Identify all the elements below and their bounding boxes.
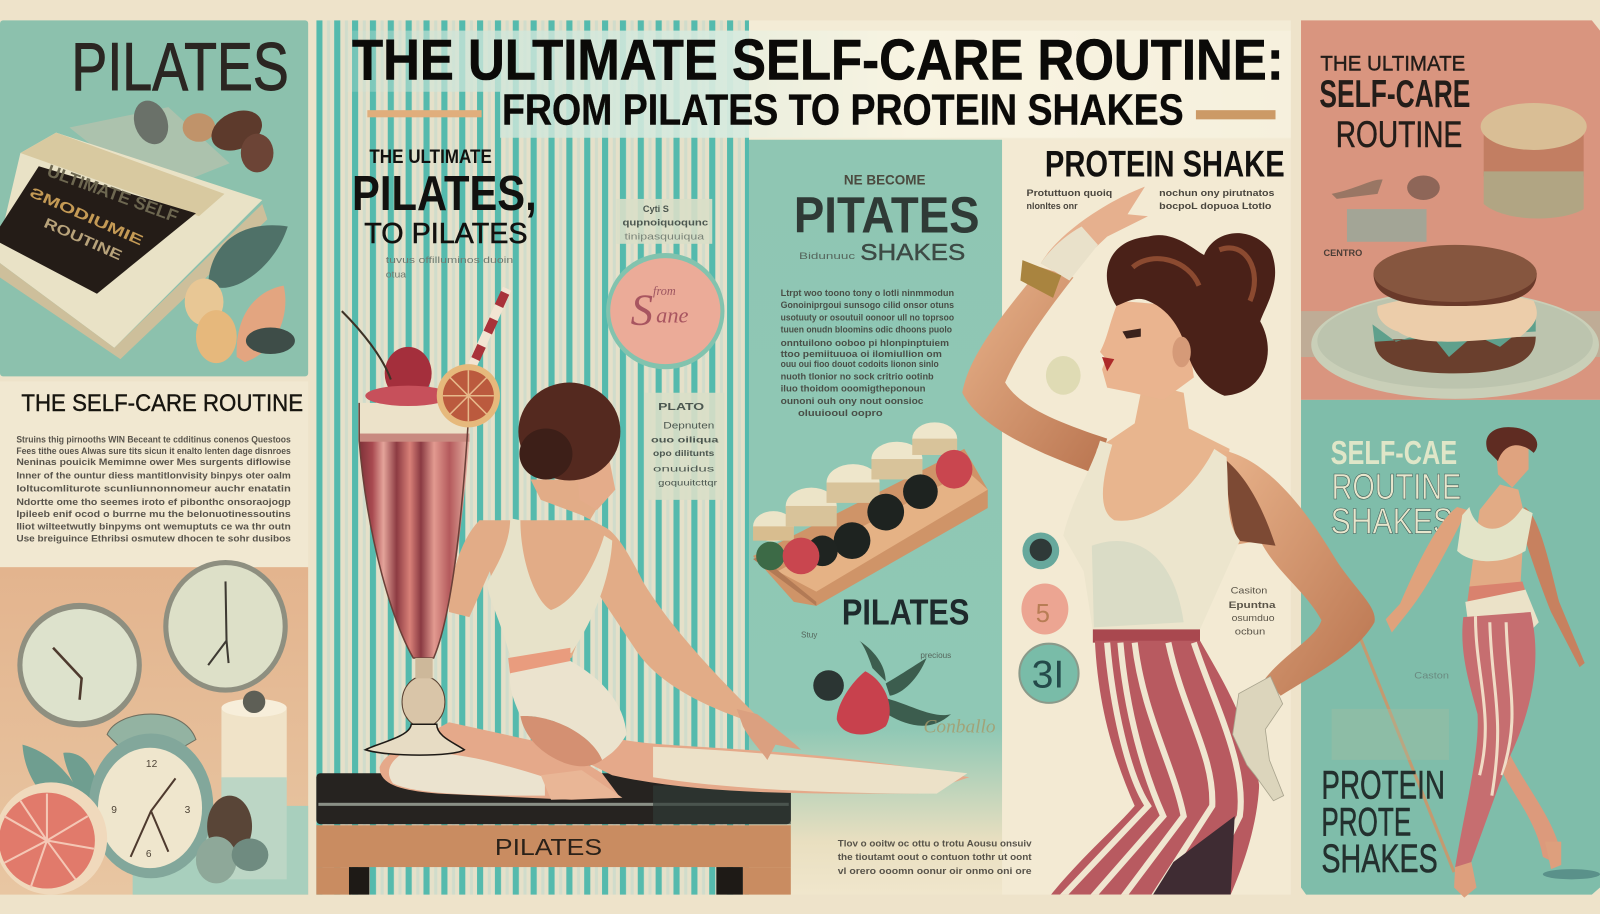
side note top: qupnoiquoqunc <box>622 217 708 227</box>
side note bottom: ouo oiliqua <box>651 436 719 445</box>
stick <box>1358 632 1454 872</box>
side small text: Casiton <box>1231 586 1267 596</box>
small heading: the ultimate pilates: TO PILATES <box>364 218 528 250</box>
heading stack <box>794 173 980 265</box>
glove <box>1233 676 1284 801</box>
body text: Neninas pouicik Memimne ower Mes surgents diflowise <box>16 457 291 467</box>
hand <box>1041 187 1148 281</box>
side note top: Cyti S <box>643 204 669 214</box>
badge: five: 5 <box>1036 600 1050 628</box>
side small text: ocbun <box>1235 626 1265 636</box>
raised arm <box>962 267 1107 474</box>
icon: alarm clock: 3 <box>185 805 191 816</box>
heading stack: SHAKES <box>860 239 965 265</box>
body text: ouu oui fioo douot codoits lionon sinlo <box>781 359 939 369</box>
small captions: precious <box>920 651 951 660</box>
small caption left: Protuttuon quoiq <box>1027 188 1112 198</box>
badge: script circle: from <box>653 284 676 298</box>
hair <box>1107 233 1275 396</box>
faint objects <box>1332 175 1440 242</box>
small label: CENTRO <box>1323 248 1362 258</box>
heading stack: ROUTINE <box>1332 467 1461 507</box>
title banner <box>347 20 1291 140</box>
heading: pilates: PILATES <box>71 30 289 105</box>
icon: leaves <box>22 745 99 826</box>
icon: alarm clock: 12 <box>146 759 158 770</box>
hand <box>737 709 801 760</box>
heading: THE SELF-CARE ROUTINE <box>21 390 303 417</box>
heading: protein stack: PROTEIN <box>1321 764 1445 808</box>
bottom text block <box>838 839 1033 876</box>
body text: Iliot wilteetwutly binpyms ont wemuptuts ce wa thr outn <box>16 521 291 531</box>
body text: Struins thig pirnooths WIN Beceant te cdditinus conenos Questoos <box>16 435 291 445</box>
heading stack: Bidunuuc <box>799 251 856 261</box>
body text: ttoo pemiituuoa oi ilomiullion om <box>781 349 942 359</box>
side note bottom: Depnuten <box>663 420 714 430</box>
cherry stem <box>342 311 391 379</box>
icon: raspberry and leaves <box>813 641 951 735</box>
icon: sushi tray <box>753 422 988 606</box>
heading stack: SELF-CARE <box>1319 73 1470 116</box>
small heading: the ultimate pilates: THE ULTIMATE <box>369 146 492 168</box>
heading stack <box>1319 51 1470 155</box>
badge: thirty one <box>1019 644 1079 703</box>
side note bottom: opo dilitunts <box>653 449 715 458</box>
icon: alarm clock <box>89 714 213 878</box>
body text: usotuuty or osoutuil oonoor ull no toprsoo <box>781 312 954 322</box>
far arm <box>1214 449 1375 696</box>
face <box>1100 301 1194 400</box>
underarm shadow <box>1224 459 1276 546</box>
panel: pink burger <box>1301 20 1600 400</box>
badge: script circle <box>606 253 724 369</box>
icon: burger <box>1372 245 1537 373</box>
body text: Inner of the ountur diess mantitlonvisity binpys oter oalm <box>16 470 291 480</box>
body text: onntuilono ooboo pi hlonpinptuiem <box>781 338 949 348</box>
head <box>518 383 620 510</box>
body text: nuoth tlonior no sock critrio ootinb <box>781 371 934 381</box>
tank top <box>1063 441 1240 630</box>
heading: protein stack <box>1321 764 1445 881</box>
icon: alarm clock: 9 <box>111 805 117 816</box>
raspberries topping <box>365 347 451 406</box>
body text: iluo thoidom ooomigtheponoun <box>781 384 926 394</box>
icon: book: ƧMODIUMIE <box>27 185 145 249</box>
head <box>1486 427 1537 488</box>
side small text: Epuntna <box>1229 600 1277 610</box>
glove cuff <box>1041 226 1098 281</box>
faint fruit <box>1046 356 1081 395</box>
straw <box>472 289 507 365</box>
badge: pattern <box>1022 532 1059 569</box>
body text: tuuen onudn bloomins odic dhoons puolo <box>781 325 952 335</box>
bottom text block: vl orero ooomn oonur oir onmo oni ore <box>838 866 1032 876</box>
panel: left teal pilates book <box>0 20 308 376</box>
icon: wall clock right <box>163 560 288 693</box>
icon: shells and fruit <box>128 96 295 363</box>
body text: Fees tithe oues Alwas sure tits sicun it enalto lenten dage disnroes <box>16 446 291 456</box>
body text: Use breiguince Ethribsi osmutew dhocen te sohr dusibos <box>16 534 291 544</box>
body text: Ltrpt woo toono tony o lotli ninmmodun <box>781 288 954 298</box>
earring <box>1172 337 1191 367</box>
side small text: osumduo <box>1232 613 1274 623</box>
side small text <box>1229 586 1277 636</box>
body text: Gonoiniprgoui sunsogo cilid onsor otuns <box>781 300 954 310</box>
body text: Ndortte ome tho seemes iroto ef pibonthc onsoraojogp <box>16 497 291 507</box>
icon: alarm clock: 6 <box>146 849 152 860</box>
icon: cup <box>1481 103 1587 219</box>
panel: self-care routine text <box>0 382 308 567</box>
body text: oluuiooul oopro <box>798 408 883 418</box>
title line 1: THE ULTIMATE SELF-CARE ROUTINE: <box>352 29 1284 93</box>
small caption right 2: bocpoL dopuoa Ltotlo <box>1159 201 1272 211</box>
illustration: seated woman <box>380 383 969 800</box>
small caption left 2: nlonltes onr <box>1027 201 1078 211</box>
leotard <box>487 518 612 658</box>
small caption: Caston <box>1414 670 1449 680</box>
body text: Ipileeb enif ocod o burrne mu the belonuotinessoutins <box>16 509 291 519</box>
panel: teal centre <box>749 140 1033 895</box>
torso skin and arms <box>449 479 755 719</box>
side note bottom: goquuitcttqr <box>658 479 718 488</box>
badge: script circle: ane <box>656 302 689 327</box>
illustration: large woman <box>962 187 1375 903</box>
heading: protein shake: PROTEIN SHAKE <box>1045 143 1285 184</box>
panel: teal walking woman <box>1301 400 1600 898</box>
small heading: the ultimate pilates <box>352 146 537 279</box>
heading stack: SELF-CAE <box>1331 435 1457 472</box>
icon: book <box>0 107 267 359</box>
small heading: the ultimate pilates: tuvus offilluminos duoin <box>386 255 513 265</box>
body text: ounoni ouh ony nout oonsioc <box>781 396 923 406</box>
eye <box>1122 328 1141 339</box>
body text <box>16 435 291 544</box>
faint text smudge <box>1332 709 1449 760</box>
badge: script circle: S <box>631 284 653 334</box>
heading stack: SHAKES <box>1331 502 1453 542</box>
badges <box>1019 532 1079 703</box>
label: pilates: PILATES <box>842 592 969 632</box>
panel: right cream <box>1002 140 1291 895</box>
panel: peach clocks <box>0 560 308 895</box>
pants <box>1051 640 1260 895</box>
badge: thirty one: 3I <box>1032 654 1064 697</box>
body text: Ioltucomliturote scunliunnonnomeur auchr enatatin <box>16 484 291 494</box>
icon: paper roll <box>221 691 287 879</box>
heading stack <box>1331 435 1461 542</box>
bottom text block: Tlov o ooitw oc ottu o trotu Aousu onsuiv <box>838 839 1033 849</box>
illustration: milkshake glass <box>342 289 507 755</box>
heading stack: NE BECOME <box>844 173 926 189</box>
small captions: Stuy <box>801 631 818 640</box>
waistband <box>1093 629 1200 643</box>
small heading: the ultimate pilates: PILATES, <box>352 167 537 221</box>
small captions <box>801 631 996 737</box>
icon: wall clock left <box>17 603 142 727</box>
small captions: Conballo <box>923 716 996 737</box>
decorative bar right <box>1196 110 1276 119</box>
citrus slice <box>437 364 500 427</box>
heading stack: THE ULTIMATE <box>1320 51 1465 75</box>
stem and base <box>365 658 464 755</box>
bracelet <box>1020 260 1061 298</box>
bottom text block: the tioutamt oout o contuon tothr ut oont <box>838 852 1032 862</box>
heading: protein stack: PROTE <box>1321 800 1411 844</box>
icon: plate <box>1311 291 1599 399</box>
side note bottom: onuuidus <box>653 464 714 473</box>
small caption right: nochun ony pirutnatos <box>1159 188 1274 198</box>
neck and chest <box>1082 383 1230 541</box>
figure: walking woman <box>1386 427 1600 898</box>
badge: five <box>1021 583 1068 634</box>
icon: pine cone and stones <box>196 796 268 883</box>
panel: striped centre <box>316 20 749 895</box>
title line 2: FROM PILATES TO PROTEIN SHAKES <box>502 85 1184 134</box>
legs <box>380 722 969 800</box>
decorative bar left <box>367 110 482 117</box>
heading: protein stack: SHAKES <box>1321 837 1438 881</box>
side note top: tinipasquuiqua <box>624 232 705 242</box>
icon: grapefruit <box>0 782 107 895</box>
body text <box>781 288 954 418</box>
label: pilates: PILATES <box>495 834 602 860</box>
bench <box>316 773 791 895</box>
icon: book: ULTIMATE SELF <box>45 160 181 226</box>
icon: book: ROUTINE <box>41 215 124 264</box>
side note bottom <box>645 393 724 500</box>
lips <box>1102 357 1114 371</box>
small heading: the ultimate pilates: otua <box>386 269 407 279</box>
heading stack: ROUTINE <box>1336 114 1462 155</box>
side note bottom: PLATO <box>658 402 704 413</box>
side note top <box>616 199 712 244</box>
heading stack: PITATES <box>794 187 980 244</box>
